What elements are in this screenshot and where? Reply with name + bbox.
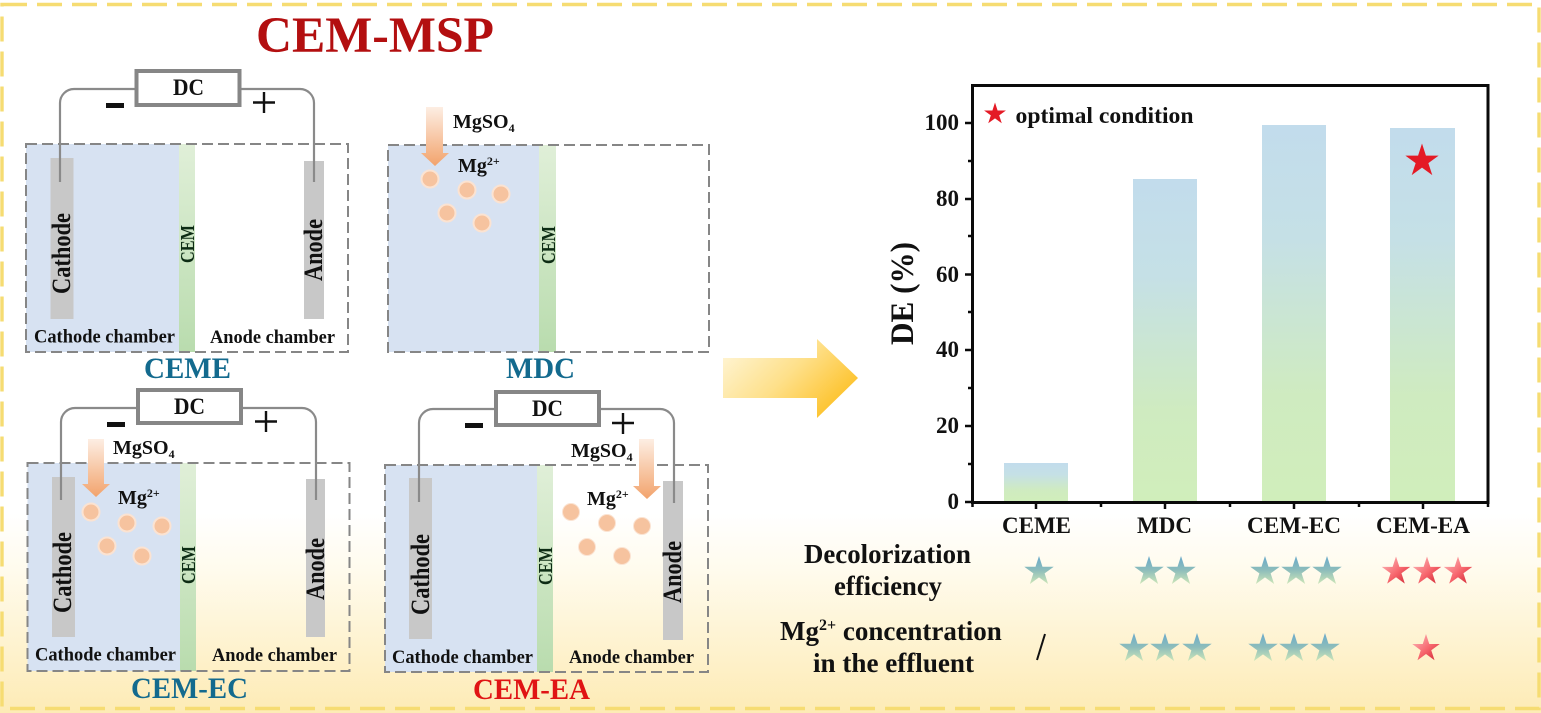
panel: CEM-EC cell [28,390,350,671]
panel: CEM-EC cell: Cathode chamber [35,644,177,666]
row label: Mg2+ concentration: Mg [780,616,819,646]
panel: CEM-EA cell [385,392,708,672]
panel: CEME cell [26,71,348,352]
panel: CEM-EA cell: Anode [658,541,687,603]
panel: CEM-EA cell: CEM [535,547,557,585]
panel: CEM-EC cell: Cathode [48,532,77,613]
y tick labels: 0 [948,489,959,514]
y tick labels [924,110,959,514]
panel: MDC cell: CEM [538,226,560,264]
panel: CEME cell: Cathode chamber [34,326,176,348]
panel: CEME cell: DC [173,75,204,100]
label: CEM-EC: CEM-EC [131,672,248,705]
y tick labels: 40 [936,337,959,362]
panel: CEM-EA cell: 2+ [616,487,629,501]
legend: optimal condition: optimal condition [1016,103,1194,128]
axes and ticks [965,86,1488,509]
row label: Mg2+ concentration [780,616,1002,678]
panel: CEM-EA cell: 4 [627,450,633,464]
rating: decolorization stars [1024,556,1472,584]
panel: MDC cell: MgSO [453,111,509,133]
x tick labels [1002,513,1470,538]
x tick labels: MDC [1137,513,1192,538]
bars [1004,125,1455,501]
panel: CEM-EC cell: 2+ [147,486,160,500]
y axis title: DE (%) [885,242,921,345]
panel: MDC cell: Mg [458,155,487,177]
y tick labels: 60 [936,262,959,287]
panel: CEM-EC cell: 4 [169,447,175,461]
y tick labels: 80 [936,186,959,211]
arrow: to chart [723,339,858,418]
panel: CEM-EC cell: DC [174,394,205,419]
panel: CEME cell: Anode chamber [210,327,336,348]
panel: CEM-EA cell: Mg [587,488,616,510]
label: CEME: CEME [144,352,231,385]
panel: CEM-EA cell: Cathode chamber [392,647,534,668]
panel: CEM-EC cell: Mg [118,487,147,509]
panel: MDC cell [388,107,709,352]
row label: Mg2+ concentration: 2+ [819,617,836,634]
panel: MDC cell: 4 [509,121,515,135]
panel: CEM-EA cell: Cathode [406,534,435,615]
panel: CEME cell: Cathode [47,213,76,294]
icon: optimal star on CEM-EA bar [1405,144,1439,175]
panel: CEM-EA cell: MgSO [571,440,627,462]
title: CEM-MSP [256,8,494,64]
bar chart [885,86,1488,538]
panel: CEM-EC cell: Anode chamber [212,645,338,666]
panel: CEM-EC cell: CEM [178,546,200,584]
panel: CEM-EA cell: Anode chamber [569,647,695,668]
rating: Mg2+ stars [1037,633,1440,661]
panel: CEME cell: CEM [177,225,199,263]
y tick labels: 20 [936,413,959,438]
x tick labels: CEME [1002,513,1071,538]
panel: MDC cell: 2+ [487,154,500,168]
panel: CEME cell: Anode [299,219,328,281]
row label: Decolorization efficiency: efficiency [834,571,942,601]
row label: Decolorization efficiency: Decolorization [804,539,971,569]
label: CEM-EA: CEM-EA [473,673,590,706]
row label: Decolorization efficiency [804,539,971,601]
row label: Mg2+ concentration: in the effluent [813,648,974,678]
x tick labels: CEM-EA [1376,513,1470,538]
y tick labels: 100 [924,110,959,135]
x tick labels: CEM-EC [1247,513,1341,538]
label: MDC: MDC [506,352,575,385]
panel: CEM-EC cell: Anode [301,538,330,600]
row label: Mg2+ concentration: concentration [836,616,1002,646]
panel: CEM-EA cell: DC [532,396,563,421]
panel: CEM-EC cell: MgSO [113,437,169,459]
